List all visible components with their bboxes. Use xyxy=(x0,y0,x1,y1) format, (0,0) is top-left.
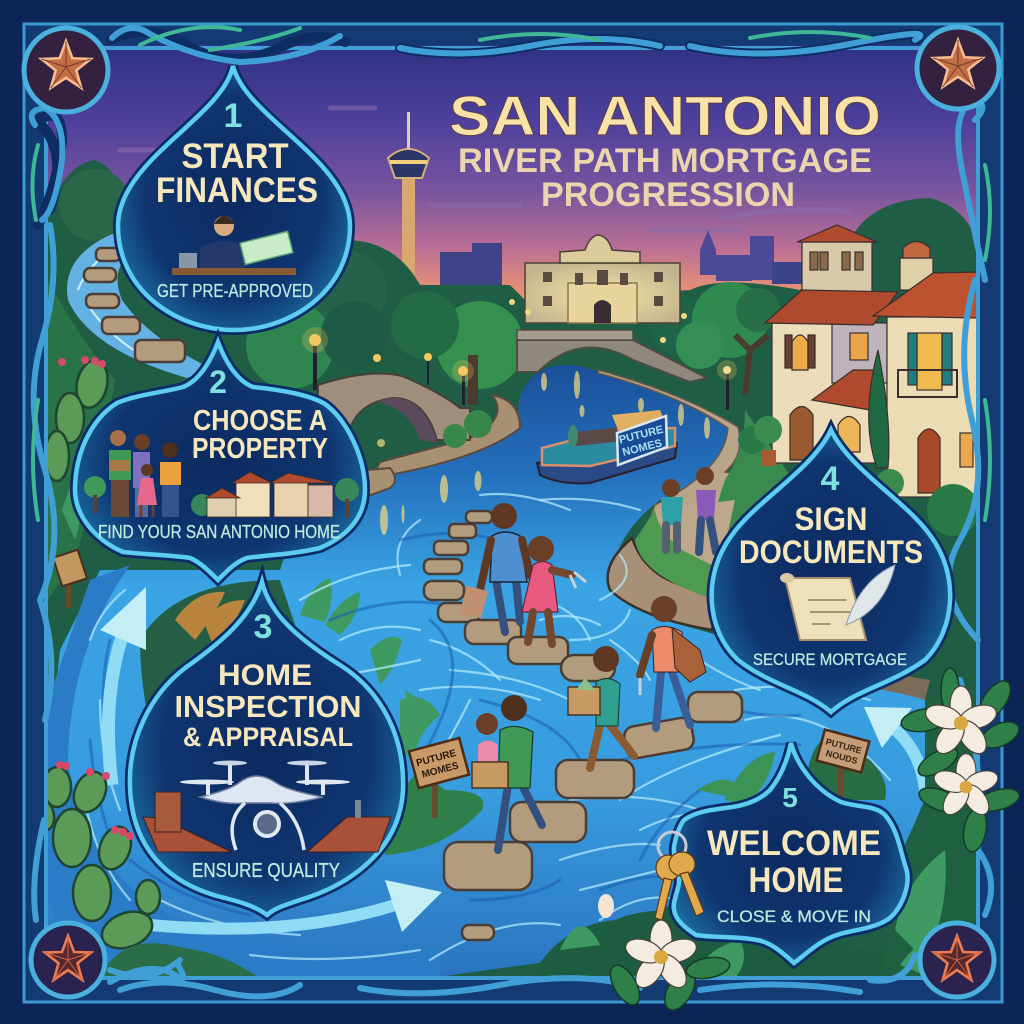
landmark: Alamo xyxy=(525,235,680,323)
corner star bottom left xyxy=(31,923,105,997)
icon: houses xyxy=(191,472,359,517)
tree clusters xyxy=(59,169,710,405)
plants between steps xyxy=(140,578,440,800)
title: PROGRESSION xyxy=(541,176,795,214)
lamp posts xyxy=(302,299,737,410)
cactus fruit xyxy=(56,761,167,959)
step 1 drop xyxy=(118,66,350,330)
step 2 drop: 2 xyxy=(209,364,227,400)
left stone path stream xyxy=(67,232,215,378)
icon: family xyxy=(84,430,181,517)
bushes by bank xyxy=(443,410,492,448)
step 4 drop: SECURE MORTGAGE xyxy=(753,650,907,669)
step 1 drop: 1 xyxy=(224,97,242,135)
step 2 drop xyxy=(75,342,365,580)
step 1 drop: START xyxy=(182,137,288,176)
step 3 drop: INSPECTION xyxy=(174,689,362,724)
icon: roofs xyxy=(143,792,391,852)
boat xyxy=(537,410,677,483)
step 5 drop: WELCOME xyxy=(707,824,881,863)
corner star top right xyxy=(917,27,999,109)
icon: banker at desk xyxy=(172,216,296,275)
title: RIVER PATH MORTGAGE xyxy=(458,142,872,180)
far bridge xyxy=(517,330,707,382)
near stone bridge xyxy=(318,373,470,443)
step 1 drop: FINANCES xyxy=(156,171,318,210)
step 5 drop: HOME xyxy=(748,861,844,900)
step 3 drop xyxy=(130,582,403,915)
river current arrow right xyxy=(864,707,925,790)
step 3 drop: ENSURE QUALITY xyxy=(192,860,340,882)
step 3 drop: & APPRAISAL xyxy=(183,722,353,752)
stepping stones xyxy=(424,511,742,940)
corner star top left xyxy=(24,28,108,112)
left foliage and cactus xyxy=(45,280,115,600)
boat: NOMES xyxy=(621,437,663,459)
skyline left xyxy=(440,243,502,292)
foliage bottom and right xyxy=(530,675,977,978)
sky xyxy=(44,44,980,314)
step 2 drop: FIND YOUR SAN ANTONIO HOME xyxy=(98,522,340,542)
sign: left xyxy=(53,550,87,608)
step 2 drop: PROPERTY xyxy=(192,433,328,465)
building: villa xyxy=(765,225,977,497)
gold reflections xyxy=(377,371,710,535)
landmark tower xyxy=(388,112,429,280)
step 2 drop: CHOOSE A xyxy=(193,405,327,437)
step 5 drop: 5 xyxy=(782,782,798,813)
river xyxy=(48,365,925,978)
right bank lawn xyxy=(714,410,800,590)
people: boy with box xyxy=(568,646,634,768)
sign: right: NOUDS xyxy=(825,748,859,766)
trees beside river xyxy=(676,282,780,395)
step 4 drop: SIGN xyxy=(794,501,868,537)
step 1 drop: GET PRE-APPROVED xyxy=(157,281,313,301)
bottom left ground xyxy=(100,943,260,978)
title xyxy=(449,84,881,214)
icon: drone xyxy=(180,760,350,850)
mound with sign: PUTURE xyxy=(415,748,458,769)
sign: right xyxy=(817,730,869,798)
step 4 drop xyxy=(712,430,950,712)
corner star bottom right xyxy=(920,923,994,997)
stone walkway right bank xyxy=(598,370,780,590)
sign: right: PUTURE xyxy=(825,736,863,756)
people: father and child with box xyxy=(472,695,542,850)
step 3 drop: 3 xyxy=(254,608,272,646)
step 3 drop: HOME xyxy=(218,659,312,692)
skyline right xyxy=(700,230,802,284)
cactus bottom left xyxy=(13,745,160,955)
rock ledge xyxy=(367,468,395,496)
icon: keys xyxy=(655,832,704,920)
step 4 drop: DOCUMENTS xyxy=(739,534,923,570)
river current arrow bottom xyxy=(150,880,442,932)
boat: PUTURE xyxy=(618,424,665,446)
river current band left xyxy=(48,565,440,978)
magnolia flowers xyxy=(598,668,1023,1015)
icon: scroll and quill xyxy=(780,565,895,640)
river current arrow left xyxy=(100,587,146,785)
step 4 drop: 4 xyxy=(821,460,840,498)
river highlights xyxy=(85,494,890,960)
step 5 drop: CLOSE & MOVE IN xyxy=(717,907,871,926)
mound with sign xyxy=(385,690,483,855)
mound with sign: MOMES xyxy=(421,760,460,781)
right shrubs xyxy=(738,416,979,536)
people: adult and child crossing xyxy=(460,503,586,644)
people on path xyxy=(661,467,716,552)
step 5 drop xyxy=(674,743,908,963)
garden shore xyxy=(608,500,735,630)
people: woman with bag xyxy=(640,596,706,728)
base greenery xyxy=(44,160,980,980)
river bank near bridge xyxy=(372,395,520,478)
title: SAN ANTONIO xyxy=(449,84,881,147)
